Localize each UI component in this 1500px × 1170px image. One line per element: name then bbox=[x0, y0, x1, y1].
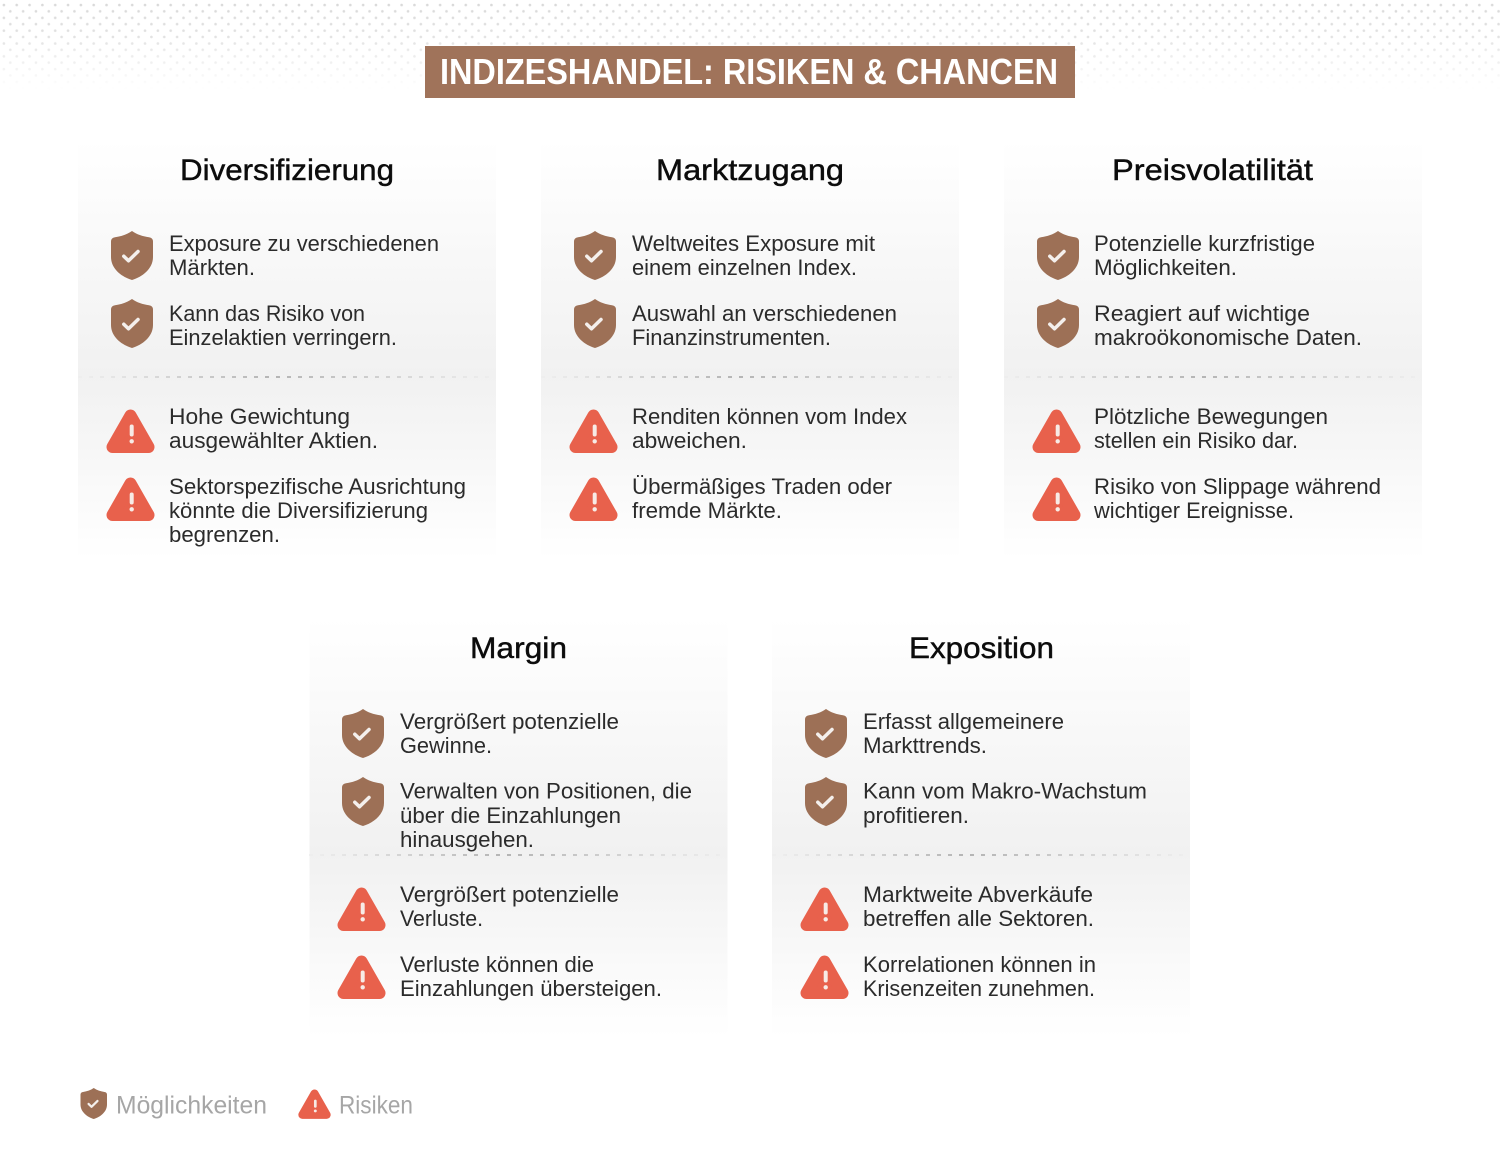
panel: Margin bbox=[309, 618, 728, 1038]
risk: Renditen: Renditen können vom Index bbox=[632, 404, 907, 429]
risk: Verluste: Vergrößert potenzielle bbox=[400, 882, 619, 907]
risk: Abverkäufe: Marktweite Abverkäufe bbox=[863, 882, 1093, 907]
risk: Renditen bbox=[576, 404, 907, 453]
risk: Bewegungen: stellen ein Risiko dar. bbox=[1094, 428, 1298, 453]
background dot pattern bbox=[2, 4, 1500, 75]
risk: Sektor bbox=[112, 474, 466, 547]
panel: Marktzugang bbox=[541, 140, 959, 560]
legend bbox=[80, 1088, 413, 1120]
risk: Einzahlungen bbox=[344, 952, 662, 1001]
heading: Marktzugang: Marktzugang bbox=[656, 154, 844, 187]
opportunity: Auswahl: Finanzinstrumenten. bbox=[632, 325, 831, 350]
risk: Traden bbox=[576, 474, 892, 523]
risk: Slippage bbox=[1038, 474, 1381, 523]
panel: Exposition bbox=[772, 618, 1190, 1038]
title: INDIZESHANDEL: RISIKEN & CHANCEN bbox=[440, 51, 1058, 92]
panel: Preisvolatilität bbox=[1004, 140, 1422, 560]
opportunity: kurzfristig: Möglichkeiten. bbox=[1094, 255, 1237, 280]
risk: Abverkäufe bbox=[806, 882, 1094, 931]
legend: Möglichkeiten: Möglichkeiten bbox=[116, 1092, 267, 1120]
opportunity: Exposure: Märkten. bbox=[169, 255, 255, 280]
opportunity: Weltweit: Weltweites Exposure mit bbox=[632, 231, 875, 256]
opportunity: Weltweit: einem einzelnen Index. bbox=[632, 255, 857, 280]
opportunity: Markttrends: Markttrends. bbox=[863, 733, 987, 758]
risk: Sektor: könnte die Diversifizierung bbox=[169, 498, 428, 523]
opportunity: Risiko verringern: Kann das Risiko von bbox=[169, 301, 365, 326]
risk: Slippage: Risiko von Slippage während bbox=[1094, 474, 1381, 499]
risk: Traden: fremde Märkte. bbox=[632, 498, 782, 523]
opportunity: Markttrends bbox=[805, 709, 1064, 758]
risk: Sektor: begrenzen. bbox=[169, 522, 280, 547]
opportunity: Daten bbox=[1037, 299, 1362, 350]
heading: Exposition: Exposition bbox=[909, 632, 1054, 665]
opportunity: Daten: Reagiert auf wichtige bbox=[1094, 301, 1310, 326]
risk: Einzahlungen: Einzahlungen übersteigen. bbox=[400, 976, 662, 1001]
risk: Korrelationen: Korrelationen können in bbox=[863, 952, 1096, 977]
legend: Risiken: Risiken bbox=[339, 1092, 413, 1120]
opportunity: Positionen: hinausgehen. bbox=[400, 827, 534, 852]
risk: Bewegungen bbox=[1038, 404, 1328, 453]
opportunity: Auswahl: Auswahl an verschiedenen bbox=[632, 301, 897, 326]
opportunity: Auswahl bbox=[574, 299, 897, 350]
heading: Preisvolatilität: Preisvolatilität bbox=[1112, 154, 1314, 187]
risk: Einzahlungen: Verluste können die bbox=[400, 952, 594, 977]
opportunity: Positionen bbox=[342, 777, 692, 852]
risk: Bewegungen: Plötzliche Bewegungen bbox=[1094, 404, 1328, 429]
opportunity: Markttrends: Erfasst allgemeinere bbox=[863, 709, 1064, 734]
risk: Verluste bbox=[344, 882, 619, 931]
risk: Renditen: abweichen. bbox=[632, 428, 747, 453]
opportunity: Gewinne bbox=[342, 709, 619, 758]
risk: Gewichtung bbox=[112, 404, 378, 453]
risk: Traden: Übermäßiges Traden oder bbox=[632, 474, 892, 499]
opportunity: Positionen: Verwalten von Positionen, die bbox=[400, 778, 692, 804]
risk: Verluste: Verluste. bbox=[400, 906, 483, 931]
opportunity: kurzfristig bbox=[1037, 231, 1315, 280]
risk: Sektor: Sektorspezifische Ausrichtung bbox=[169, 474, 466, 499]
panel: Diversifizierung bbox=[78, 140, 496, 560]
opportunity: Makro-Wachstum bbox=[805, 777, 1147, 828]
opportunity: Makro-Wachstum: Kann vom Makro-Wachstum bbox=[863, 778, 1147, 804]
heading: Margin: Margin bbox=[470, 632, 567, 665]
opportunity: Exposure bbox=[111, 231, 439, 280]
legend: Risiken bbox=[302, 1092, 413, 1120]
risk: Gewichtung: Hohe Gewichtung bbox=[169, 404, 350, 429]
risk: Gewichtung: ausgewählter Aktien. bbox=[169, 428, 378, 453]
opportunity: Positionen: über die Einzahlungen bbox=[400, 803, 621, 828]
risk: Korrelationen bbox=[806, 952, 1096, 1001]
risk: Abverkäufe: betreffen alle Sektoren. bbox=[863, 906, 1094, 931]
heading: Diversifizierung: Diversifizierung bbox=[180, 154, 394, 187]
opportunity: Daten: makroökonomische Daten. bbox=[1094, 325, 1362, 350]
opportunity: Makro-Wachstum: profitieren. bbox=[863, 803, 969, 828]
opportunity: Gewinne: Gewinne. bbox=[400, 733, 492, 758]
opportunity: Gewinne: Vergrößert potenzielle bbox=[400, 709, 619, 734]
risk: Korrelationen: Krisenzeiten zunehmen. bbox=[863, 976, 1095, 1001]
opportunity: Weltweit bbox=[574, 231, 875, 280]
opportunity: kurzfristig: Potenzielle kurzfristige bbox=[1094, 231, 1315, 256]
opportunity: Risiko verringern: Einzelaktien verringern. bbox=[169, 325, 397, 350]
risk: Slippage: wichtiger Ereignisse. bbox=[1093, 498, 1294, 523]
opportunity: Exposure: Exposure zu verschiedenen bbox=[169, 231, 439, 256]
opportunity: Risiko verringern bbox=[111, 299, 397, 350]
